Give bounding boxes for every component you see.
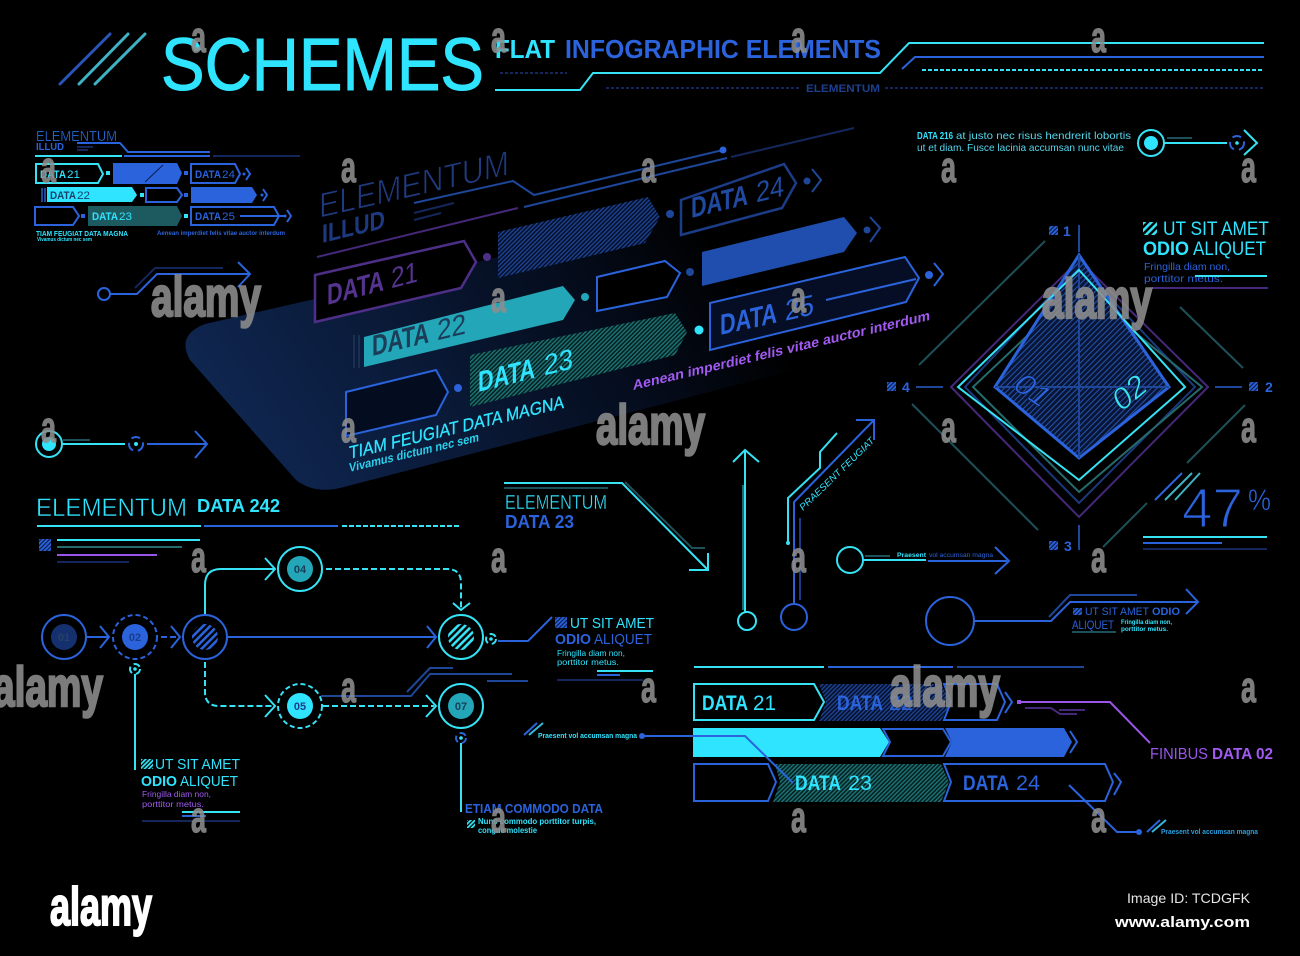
flow heading: DATA 242 — [197, 496, 280, 516]
callout: right of end node: ALIQUET — [594, 631, 652, 648]
flow heading — [36, 494, 460, 562]
callout: right note — [1069, 785, 1258, 836]
header — [60, 23, 1264, 106]
watermarks: a — [791, 273, 806, 322]
row 1: 21 — [67, 169, 80, 181]
small heading: ILLUD — [36, 142, 64, 153]
stat: 47 percent: 47 — [1182, 476, 1243, 539]
radar diamonds — [951, 255, 1208, 517]
node 04 — [278, 547, 322, 591]
callout: below node 02: porttitor metus. — [142, 799, 204, 809]
flow connectors — [87, 558, 528, 717]
radar outer axis marks — [912, 225, 1245, 550]
watermarks: alamy — [596, 393, 705, 456]
arrow: praesent circle — [837, 547, 1009, 574]
tilted captions: TIAM FEUGIAT DATA MAGNA — [349, 391, 565, 463]
tilted row 1: DATA — [691, 179, 748, 225]
bar row 3: DATA — [963, 772, 1009, 795]
tilted row 2: 22 — [437, 308, 466, 347]
radar chart — [887, 223, 1273, 554]
callout: below node 07: ETIAM COMMODO DATA — [465, 801, 604, 816]
callout: finibus data 02: FINIBUS — [1150, 746, 1208, 763]
watermarks: a — [941, 403, 956, 452]
tilted row 3: DATA — [478, 352, 535, 399]
row 3: DATA — [92, 211, 118, 223]
callout: below node 07: Nunc commodo porttitor turpis, — [478, 817, 596, 826]
subtitle: FLAT — [495, 34, 555, 64]
small heading: ELEMENTUM — [36, 128, 117, 145]
watermarks: a — [1091, 533, 1106, 582]
arrow: praesent feugiat: PRAESENT FEUGIAT — [797, 435, 878, 513]
tilted captions — [349, 308, 930, 475]
bar row 3: DATA — [795, 772, 841, 795]
watermarks: a — [791, 13, 806, 62]
radar labels: 1 — [1063, 223, 1071, 239]
watermarks: a — [191, 793, 206, 842]
arrow: praesent circle: Praesent — [897, 552, 927, 559]
row 2 — [42, 187, 267, 203]
bar row 2 — [693, 728, 1077, 757]
bar row 1: 21 — [753, 692, 776, 715]
watermarks: a — [491, 533, 506, 582]
callout: finibus data 02: DATA 02 — [1212, 746, 1273, 763]
node end — [439, 615, 483, 659]
callout: ut sit amet right: UT SIT AMET — [1163, 219, 1269, 240]
watermarks: alamy — [890, 655, 1000, 718]
row 1: DATA — [195, 169, 221, 181]
watermarks: a — [191, 13, 206, 62]
node 07 — [439, 684, 483, 728]
small captions — [36, 229, 285, 243]
row 2: DATA — [50, 190, 76, 202]
small captions: TIAM FEUGIAT DATA MAGNA — [36, 229, 129, 238]
callout: right of end node: Fringilla diam non, — [557, 648, 625, 658]
callout: below node 02 — [130, 664, 240, 821]
bar row 1: DATA — [702, 692, 748, 715]
radar values — [1008, 367, 1154, 417]
callout: right of end node: porttitor metus. — [557, 657, 619, 667]
watermarks: a — [1241, 143, 1256, 192]
radar labels: 2 — [1265, 379, 1273, 395]
arrow: praesent feugiat — [781, 420, 878, 630]
node 01: 01 — [58, 632, 70, 644]
radar values: 01 — [1008, 367, 1056, 414]
row 3: 23 — [119, 211, 132, 223]
row 1 — [36, 163, 250, 184]
watermarks: a — [641, 663, 656, 712]
bar row 3: 23 — [848, 772, 872, 795]
tilted row 1: 21 — [391, 256, 418, 295]
tilted row 3: 25 — [785, 289, 814, 328]
callout: ut sit amet right: porttitor metus. — [1144, 273, 1223, 285]
arrow: top right target — [1138, 130, 1257, 156]
watermarks: a — [1091, 13, 1106, 62]
website: www.alamy.com — [1114, 914, 1250, 931]
radar labels: 3 — [1064, 538, 1072, 554]
callout: ut sit amet right — [1143, 219, 1269, 288]
watermarks: alamy — [1042, 267, 1152, 330]
radar labels: 4 — [902, 379, 910, 395]
bar row 1 — [694, 684, 1012, 721]
arrow: up arrow — [733, 450, 759, 630]
callout: below node 02: ALIQUET — [180, 773, 238, 790]
tilted row 1: DATA — [327, 265, 384, 312]
row 1: DATA — [40, 169, 66, 181]
text block: data 216: at justo nec risus hendrerit lobortis — [956, 130, 1131, 142]
watermarks: a — [791, 793, 806, 842]
tilted row 1 — [315, 164, 821, 322]
node 07: 07 — [455, 701, 467, 713]
callout: ut sit amet right: ODIO — [1143, 239, 1189, 260]
tilted row 2 — [354, 217, 880, 368]
node 05 — [278, 684, 322, 728]
row 1: 24 — [222, 169, 235, 181]
callout: right of end node: UT SIT AMET — [570, 615, 654, 632]
callout: right of end node — [486, 615, 654, 680]
watermarks: a — [491, 273, 506, 322]
watermarks: a — [791, 533, 806, 582]
arrow: elementum data 23: ELEMENTUM — [505, 492, 607, 514]
arrow: praesent circle: vol accumsan magna — [929, 552, 993, 559]
callout: left note: Praesent vol accumsan magna — [538, 733, 637, 740]
tilted row 2: DATA — [372, 317, 429, 363]
panel: flow diagram — [36, 494, 654, 835]
small captions: Vivamus dictum nec sem — [37, 237, 92, 243]
watermarks: a — [491, 13, 506, 62]
node 02: 02 — [129, 632, 141, 644]
row 3: DATA — [195, 211, 221, 223]
callout: below node 02: UT SIT AMET — [155, 756, 240, 773]
arrow: elementum data 23 — [504, 482, 708, 570]
radar labels — [887, 223, 1273, 554]
tilted heading: ELEMENTUM — [319, 143, 509, 226]
tilted captions: Vivamus dictum nec sem — [349, 430, 479, 475]
watermarks: a — [341, 663, 356, 712]
watermarks: alamy — [151, 265, 261, 328]
callout: below node 02: ODIO — [141, 773, 177, 790]
watermarks: a — [491, 793, 506, 842]
callout: below node 07: congue molestie — [478, 826, 538, 835]
flow heading: ELEMENTUM — [36, 494, 187, 522]
arrow: large circle with callout: porttitor metus. — [1121, 627, 1168, 633]
watermarks: a — [1241, 403, 1256, 452]
header label: ELEMENTUM — [806, 83, 880, 95]
node 02 — [113, 615, 157, 659]
watermarks: a — [191, 533, 206, 582]
arrow: large circle with callout — [926, 589, 1198, 645]
tilted row 3 — [346, 257, 943, 436]
watermarks: a — [1241, 663, 1256, 712]
arrow: large circle with callout: ALIQUET — [1072, 618, 1115, 632]
stat: 47 percent — [1143, 473, 1271, 549]
tilted heading — [317, 128, 854, 257]
watermarks: a — [341, 143, 356, 192]
watermarks: a — [641, 143, 656, 192]
node 03 — [183, 615, 227, 659]
image id: Image ID: TCDGFK — [1127, 890, 1251, 906]
watermarks: a — [41, 403, 56, 452]
arrow: elementum data 23: DATA 23 — [505, 512, 574, 532]
tilted row 1: 24 — [756, 170, 784, 209]
callout: ut sit amet right: Fringilla diam non, — [1144, 261, 1230, 273]
logo: alamy — [50, 877, 152, 937]
bar row 1: 22 — [889, 692, 913, 715]
panel: small bar chart top left — [35, 128, 300, 243]
arrow: large circle with callout: ODIO — [1152, 606, 1180, 618]
title: SCHEMES — [161, 23, 484, 106]
callout: ut sit amet right: ALIQUET — [1193, 239, 1266, 260]
stat: 47 percent: % — [1248, 484, 1271, 517]
callout: below node 07 — [456, 733, 604, 835]
arrow: large circle with callout: UT SIT AMET — [1085, 606, 1149, 618]
small captions: Aenean imperdiet felis vitae auctor interdum — [157, 230, 285, 237]
text block: data 216 — [917, 130, 1131, 154]
row 3: 25 — [222, 211, 235, 223]
callout: left note — [524, 723, 793, 783]
callout: right note: Praesent vol accumsan magna — [1161, 829, 1258, 836]
footer — [50, 877, 1251, 937]
bar row 3: 24 — [1016, 772, 1040, 795]
tilted captions: Aenean imperdiet felis vitae auctor interdum — [633, 308, 930, 394]
tilted heading: ILLUD — [322, 204, 385, 249]
node 05: 05 — [294, 701, 306, 713]
callout: below node 02: Fringilla diam non, — [142, 789, 211, 799]
bar row 3 — [694, 764, 1121, 802]
text block: data 216: DATA 216 — [917, 130, 953, 142]
arrow: target arrow left — [36, 431, 207, 458]
small heading — [36, 128, 117, 153]
tilted background panel — [185, 170, 960, 490]
text block: data 216: ut et diam. Fusce lacinia accumsan nunc vitae — [917, 142, 1124, 154]
header rule lines — [495, 43, 1264, 90]
row 3 — [35, 206, 291, 226]
watermarks: a — [41, 143, 56, 192]
icon: header slashes — [60, 34, 145, 84]
callout: right of end node: ODIO — [555, 631, 591, 648]
row 2: 22 — [77, 190, 90, 202]
watermarks: a — [1091, 793, 1106, 842]
watermarks: a — [941, 143, 956, 192]
tilted row 3: DATA — [720, 297, 777, 342]
node 01 — [42, 615, 86, 659]
arrow: large circle with callout: Fringilla diam non, — [1121, 620, 1172, 626]
tilted row 3: 23 — [544, 343, 573, 382]
arrow: connector left — [98, 262, 250, 300]
bar row 1: DATA — [837, 692, 883, 715]
watermarks: a — [341, 403, 356, 452]
panel: bottom bar chart — [524, 667, 1273, 836]
node 04: 04 — [294, 564, 307, 576]
callout: finibus data 02 — [1017, 700, 1273, 763]
radar values: 02 — [1105, 369, 1154, 417]
panel: perspective tilted chart — [185, 128, 960, 490]
subtitle: INFOGRAPHIC ELEMENTS — [565, 34, 881, 64]
